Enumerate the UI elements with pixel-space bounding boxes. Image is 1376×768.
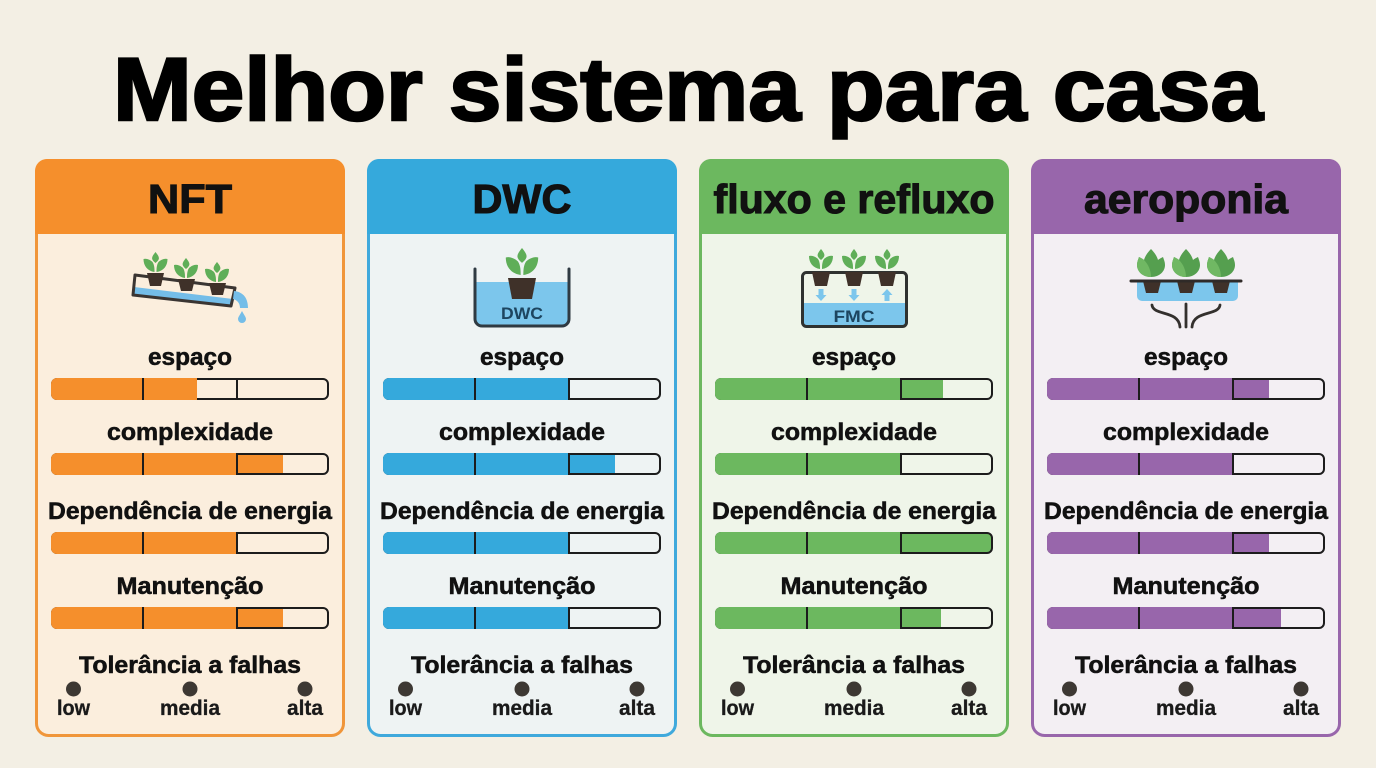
metric: espaço	[715, 344, 992, 400]
metric: complexidade: complexidade	[107, 419, 273, 446]
scale: Tolerância a falhas: media	[824, 697, 884, 720]
metric: complexidade: complexidade	[1103, 419, 1269, 446]
scale: Tolerância a falhas: low	[57, 697, 91, 720]
header: DWC	[367, 159, 677, 234]
metric: complexidade	[1047, 419, 1324, 475]
metric: complexidade	[715, 419, 992, 475]
scale: Tolerância a falhas: Tolerância a falhas	[411, 652, 633, 679]
scale: Tolerância a falhas: media	[492, 697, 552, 720]
metric: complexidade: complexidade	[439, 419, 605, 446]
metric: Dependência de energia	[712, 498, 996, 554]
metric: Dependência de energia	[48, 498, 332, 554]
header: fluxo e refluxo: fluxo e refluxo	[714, 176, 994, 222]
header: DWC: DWC	[472, 176, 572, 222]
scale: Tolerância a falhas: alta	[951, 697, 987, 720]
metric: espaço	[1047, 344, 1324, 400]
icon: NFT channel	[133, 252, 248, 323]
icon: aeroponic tray	[1131, 249, 1241, 327]
metric: Manutenção: Manutenção	[1112, 573, 1260, 600]
scale: Tolerância a falhas: Tolerância a falhas	[79, 652, 301, 679]
scale: Tolerância a falhas: media	[1156, 697, 1216, 720]
panel: DWC	[367, 159, 677, 736]
metric: Manutenção: Manutenção	[780, 573, 928, 600]
header: fluxo e refluxo	[699, 159, 1009, 234]
metric: Manutenção: Manutenção	[448, 573, 596, 600]
metric: Manutenção	[715, 573, 992, 629]
metric: Dependência de energia	[1044, 498, 1328, 554]
metric: Manutenção	[1047, 573, 1324, 629]
scale: Tolerância a falhas	[389, 652, 655, 720]
icon: DWC tank	[475, 248, 569, 326]
icon: FMC tray	[802, 249, 906, 326]
panel: fluxo e refluxo	[699, 159, 1009, 736]
metric: espaço	[383, 344, 660, 400]
title: Melhor sistema para casa	[113, 39, 1265, 139]
metric: complexidade	[51, 419, 328, 475]
scale: Tolerância a falhas: low	[1053, 697, 1087, 720]
header: aeroponia: aeroponia	[1084, 176, 1289, 222]
metric: espaço: espaço	[480, 344, 564, 371]
header: aeroponia	[1031, 159, 1341, 234]
icon: DWC tank: DWC	[501, 304, 543, 323]
metric: Manutenção: Manutenção	[116, 573, 264, 600]
icon: FMC tray: FMC	[834, 307, 874, 326]
metric: espaço: espaço	[148, 344, 232, 371]
metric: complexidade	[383, 419, 660, 475]
metric: complexidade: complexidade	[771, 419, 937, 446]
metric: Dependência de energia: Dependência de energia	[380, 498, 664, 525]
scale: Tolerância a falhas: low	[389, 697, 423, 720]
scale: Tolerância a falhas: alta	[287, 697, 323, 720]
metric: espaço: espaço	[812, 344, 896, 371]
scale: Tolerância a falhas: Tolerância a falhas	[1075, 652, 1297, 679]
metric: espaço	[51, 344, 328, 400]
scale: Tolerância a falhas	[721, 652, 987, 720]
scale: Tolerância a falhas	[1053, 652, 1319, 720]
scale: Tolerância a falhas: media	[160, 697, 220, 720]
panel: NFT	[35, 159, 345, 736]
metric: Dependência de energia: Dependência de energia	[1044, 498, 1328, 525]
metric: Manutenção	[383, 573, 660, 629]
header: NFT	[35, 159, 345, 234]
metric: Manutenção	[51, 573, 328, 629]
metric: Dependência de energia: Dependência de energia	[712, 498, 996, 525]
scale: Tolerância a falhas: alta	[1283, 697, 1319, 720]
scale: Tolerância a falhas	[57, 652, 323, 720]
header: NFT: NFT	[148, 176, 232, 222]
metric: Dependência de energia	[380, 498, 664, 554]
metric: espaço: espaço	[1144, 344, 1228, 371]
panel: aeroponia	[1031, 159, 1341, 736]
scale: Tolerância a falhas: alta	[619, 697, 655, 720]
scale: Tolerância a falhas: Tolerância a falhas	[743, 652, 965, 679]
scale: Tolerância a falhas: low	[721, 697, 755, 720]
metric: Dependência de energia: Dependência de energia	[48, 498, 332, 525]
